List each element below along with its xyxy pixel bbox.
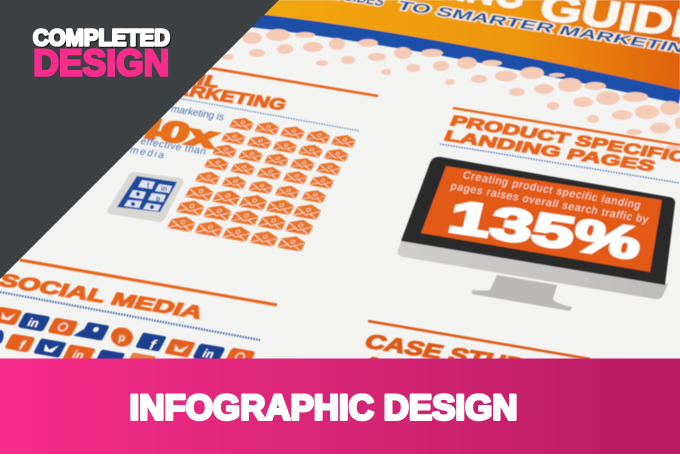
monitor screen — [421, 166, 662, 272]
icon: pinterest orange: p — [117, 331, 126, 345]
email heading — [140, 63, 289, 114]
product heading — [441, 113, 680, 175]
email heading rule — [150, 58, 378, 96]
icon: facebook orange: f — [16, 338, 28, 352]
icon: twitter blue — [33, 338, 67, 358]
icon: pinterest orange — [110, 326, 134, 348]
icon: linkedin blue: in — [200, 347, 217, 361]
email comparison text: social media — [88, 138, 166, 161]
icon: linkedin orange — [62, 344, 96, 364]
icon: twitter orange — [0, 306, 23, 326]
panel: case studies — [356, 321, 590, 397]
monitor — [398, 157, 675, 311]
halftone dot pattern — [222, 29, 680, 151]
icon: facebook blue: f — [146, 338, 159, 353]
product heading: LANDING PAGES — [441, 128, 658, 175]
logo word completed: COMPLETED — [33, 25, 170, 51]
screen caption: pages raises overall search traffic by — [449, 180, 651, 226]
blue header stripe — [240, 19, 680, 97]
header subtitle — [331, 0, 680, 58]
icon: twitter orange — [164, 338, 196, 358]
pink footer banner — [0, 358, 680, 454]
social heading rule — [20, 260, 277, 305]
135% statistic: 135% — [444, 190, 647, 269]
email heading: EMAIL — [140, 63, 223, 92]
social icon rows — [0, 306, 256, 371]
case heading — [356, 331, 573, 397]
logo: completed design — [33, 25, 171, 84]
logo shadow: COMPLETED — [34, 26, 171, 52]
icon: partial blue — [0, 329, 5, 345]
envelope grid — [168, 117, 357, 251]
orange header band — [240, 0, 680, 100]
icon: instagram blue — [94, 349, 125, 368]
screen caption: Creating product specific landing — [461, 169, 642, 212]
icon: tablet with social icons: p — [156, 196, 160, 203]
email comparison text: more effective than — [111, 131, 208, 157]
icon: orange partial — [125, 352, 156, 371]
header title — [292, 0, 680, 48]
email intro text: Email marketing is — [142, 99, 226, 123]
case heading rule — [368, 321, 590, 359]
40x statistic: 40x — [127, 110, 224, 155]
product heading rule — [453, 108, 680, 145]
product heading: PRODUCT SPECIFIC — [447, 113, 680, 166]
panel: product specific landing pages — [398, 108, 680, 311]
panel: social media — [0, 260, 277, 371]
icon: tablet with social icons: f — [147, 183, 150, 190]
case heading: ANALYSIS — [356, 353, 513, 397]
case heading: CASE STUDIES — [361, 331, 573, 384]
monitor stand — [472, 275, 572, 311]
icon: instagram orange — [47, 317, 79, 337]
email heading: MARKETING — [153, 78, 289, 114]
icon: linkedin blue — [192, 343, 226, 363]
banner title: INFOGRAPHIC DESIGN — [130, 388, 518, 428]
panel: email marketing — [88, 58, 378, 251]
icon: linkedin blue: in — [25, 316, 42, 330]
icon: linkedin blue — [17, 312, 51, 332]
icon: instagram orange — [224, 347, 256, 367]
logo word design: DESIGN — [33, 43, 169, 84]
icon: linkedin orange: in — [70, 348, 87, 362]
icon: group blue — [73, 321, 110, 341]
icon: facebook blue — [134, 332, 167, 354]
icon: tablet with social icons — [107, 172, 183, 222]
monitor chin — [398, 240, 668, 299]
dark diagonal corner — [0, 0, 279, 279]
monitor bezel — [401, 157, 675, 285]
icon: tablet with social icons: in — [161, 186, 167, 193]
icon: facebook orange — [4, 333, 36, 353]
